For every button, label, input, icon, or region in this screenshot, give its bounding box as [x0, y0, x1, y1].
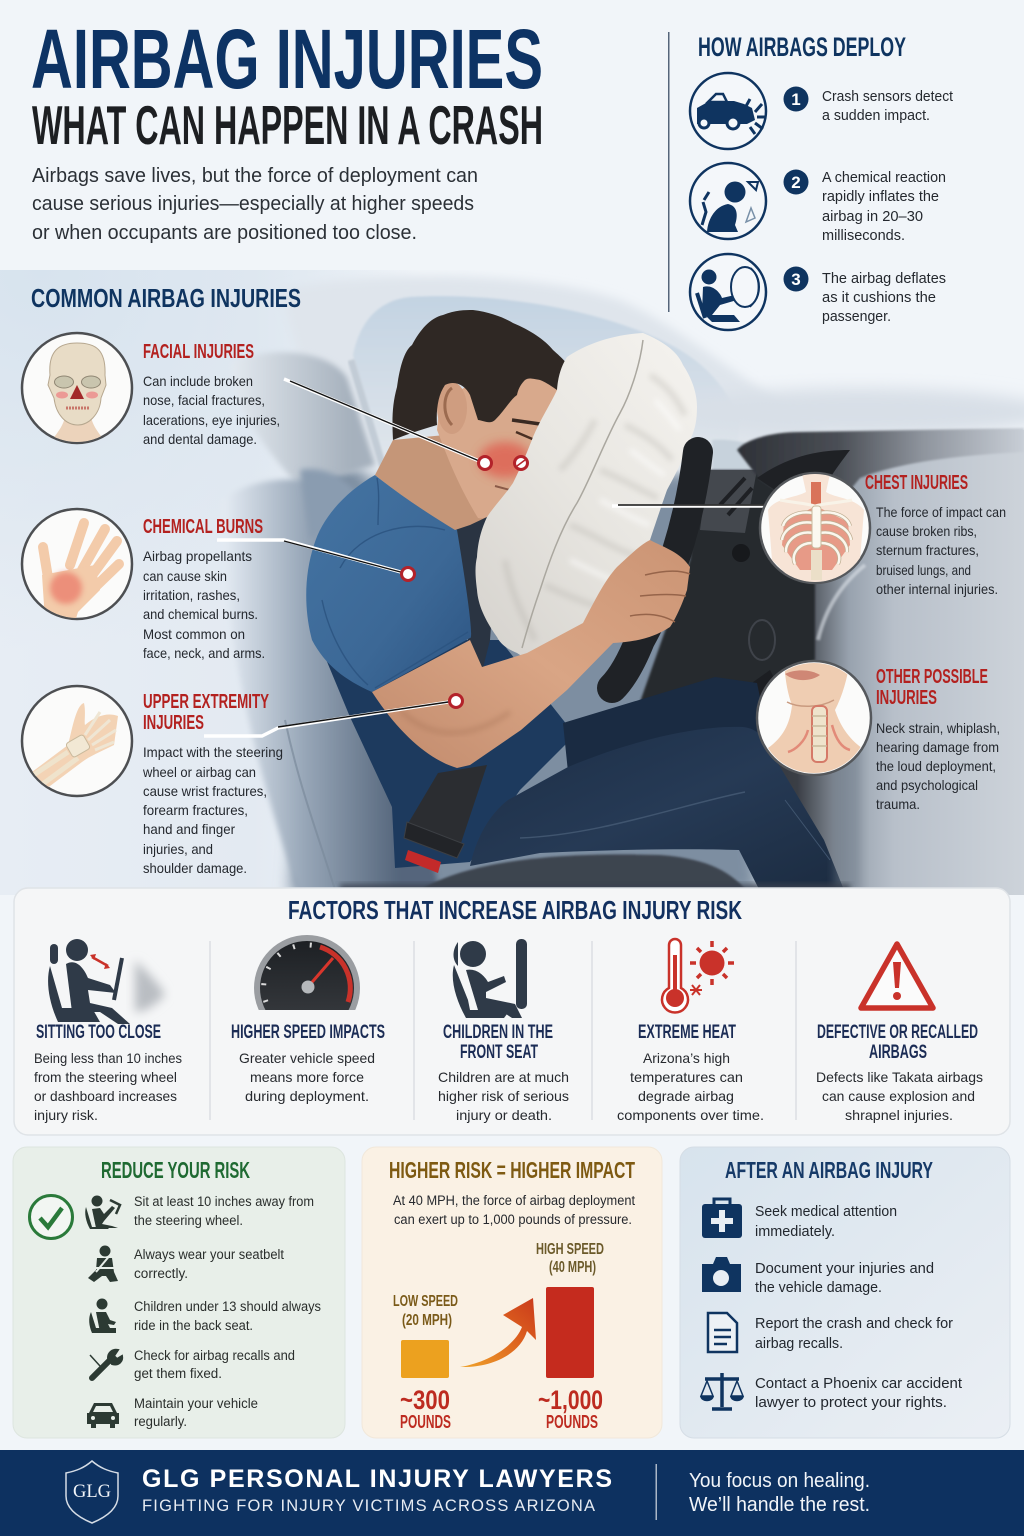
- value: about 300 pounds: ~300: [400, 1385, 450, 1415]
- text: seek medical attention: Seek medical attention: [755, 1204, 897, 1220]
- text: step 3: [822, 271, 946, 325]
- icon: skull medallion: [22, 333, 132, 445]
- text: higher speed impacts: Greater vehicle speed: [239, 1050, 375, 1066]
- text: report crash: airbag recalls.: [755, 1336, 843, 1352]
- text: step 1: [822, 89, 953, 124]
- text: report crash: [755, 1316, 953, 1352]
- heading: how airbags deploy: HOW AIRBAGS DEPLOY: [698, 32, 906, 62]
- text: chemical burns: Airbag propellants: [143, 548, 252, 564]
- heading: extreme heat: EXTREME HEAT: [638, 1022, 736, 1043]
- gap behind arm and bag: [456, 516, 491, 667]
- heading: children in the front seat: CHILDREN IN THE: [443, 1022, 553, 1043]
- lower torso: [318, 640, 575, 868]
- step number 1: 1: [791, 90, 801, 109]
- step number 1: [784, 86, 808, 112]
- callout lines and markers: [204, 379, 770, 736]
- heading: after an airbag injury: AFTER AN AIRBAG INJURY: [725, 1157, 933, 1183]
- text: sitting too close: Being less than 10 inches: [34, 1050, 182, 1066]
- factor: defective or recalled airbags: [816, 944, 983, 1123]
- text: defective or recalled airbags: shrapnel injuries.: [845, 1107, 953, 1123]
- text: step 1: Crash sensors detect: [822, 89, 953, 105]
- icon: ribcage medallion: [760, 473, 870, 583]
- text: check recalls: get them fixed.: [134, 1366, 222, 1381]
- value: about 1000 pounds: POUNDS: [546, 1412, 598, 1432]
- text: check recalls: Check for airbag recalls and: [134, 1348, 295, 1363]
- text: chemical burns: Most common on: [143, 626, 245, 642]
- icon: chemical inflation: [690, 163, 766, 239]
- label: low speed: [393, 1293, 458, 1329]
- icon: burned hand medallion: [22, 509, 132, 625]
- legs in jeans: [470, 677, 846, 895]
- intro paragraph: [32, 165, 478, 244]
- text: wear seatbelt: Always wear your seatbelt: [134, 1247, 284, 1262]
- panel: chemical burns: [22, 509, 265, 661]
- icon: document: [708, 1313, 737, 1352]
- icon: check mark: [30, 1196, 72, 1238]
- text: chest injuries: [876, 504, 1006, 597]
- heading: children in the front seat: [443, 1022, 553, 1063]
- text: step 2: airbag in 20–30: [822, 209, 923, 225]
- text: check recalls: [134, 1348, 295, 1381]
- text: upper extremity injuries: wheel or airbag can: [142, 764, 256, 780]
- icon: speedometer: [254, 935, 360, 1010]
- heading: upper extremity injuries: [143, 691, 269, 734]
- step number 2: [784, 170, 808, 194]
- man body in blue shirt: [306, 475, 471, 692]
- panel: higher risk equals higher impact: [362, 1147, 662, 1438]
- text: maintain vehicle: regularly.: [134, 1414, 187, 1429]
- text: other possible injuries: trauma.: [876, 796, 920, 812]
- footer band: [0, 1450, 1024, 1536]
- text: seek medical attention: immediately.: [755, 1224, 835, 1240]
- text: upper extremity injuries: shoulder damage.: [143, 860, 247, 876]
- text: other possible injuries: Neck strain, whiplash,: [876, 720, 1000, 736]
- icon: airbag deflates: [690, 254, 766, 330]
- interior mid tone: [280, 468, 758, 888]
- forearm and hand: [372, 540, 690, 768]
- intro paragraph: cause serious injuries—especially at higher speeds: [32, 193, 474, 215]
- text: step 3: passenger.: [822, 309, 891, 325]
- text: chemical burns: [143, 548, 265, 661]
- title: AIRBAG INJURIES: [31, 12, 543, 106]
- icon: seatbelt: [88, 1246, 118, 1282]
- text: chemical burns: can cause skin: [143, 568, 227, 584]
- text: higher speed impacts: [239, 1050, 375, 1104]
- heading: sitting too close: SITTING TOO CLOSE: [36, 1022, 161, 1043]
- text: chest injuries: other internal injuries.: [876, 581, 998, 597]
- text: maintain vehicle: Maintain your vehicle: [134, 1396, 258, 1411]
- pillar: [351, 360, 384, 470]
- arrow: rising force: [460, 1298, 536, 1367]
- text: step 1: a sudden impact.: [822, 108, 930, 124]
- text: sit away from wheel: the steering wheel.: [134, 1213, 243, 1228]
- heading: higher risk: HIGHER RISK = HIGHER IMPACT: [389, 1157, 635, 1183]
- icon: scales of justice: [700, 1373, 744, 1409]
- icon: warning triangle: [861, 944, 933, 1008]
- text: report crash: Report the crash and check for: [755, 1316, 953, 1332]
- icon: child in front seat: [453, 939, 527, 1018]
- text: defective or recalled airbags: can cause explosion and: [822, 1088, 975, 1104]
- heading: children in the front seat: FRONT SEAT: [460, 1042, 538, 1063]
- deployment divider: [668, 32, 670, 312]
- heading: facial injuries: FACIAL INJURIES: [143, 341, 254, 363]
- text: document injuries: Document your injuries and: [755, 1261, 934, 1277]
- icon: wrist bones medallion: [22, 686, 132, 796]
- icon: crash sensors: [690, 73, 766, 149]
- factor: sitting too close: [34, 939, 182, 1123]
- steering wheel: [612, 452, 698, 688]
- text: children in the front seat: higher risk of serious: [438, 1088, 569, 1104]
- heading: other possible injuries: INJURIES: [876, 687, 937, 709]
- logo: GLG shield: [66, 1461, 118, 1523]
- icon: car: [87, 1403, 119, 1428]
- text: upper extremity injuries: [142, 744, 283, 876]
- bar: high speed: [546, 1287, 594, 1378]
- heading: other possible injuries: [876, 666, 988, 709]
- text: children back seat: [134, 1299, 321, 1333]
- text: seek medical attention: [755, 1204, 897, 1240]
- panel: chest injuries: [760, 472, 1006, 597]
- logo: GLG shield: GLG: [73, 1481, 111, 1502]
- value: about 1000 pounds: ~1,000: [538, 1385, 603, 1415]
- text: contact a lawyer: [755, 1376, 962, 1411]
- text: sit away from wheel: [134, 1194, 314, 1228]
- footer firm name: GLG PERSONAL INJURY LAWYERS: [142, 1465, 612, 1493]
- step number 3: 3: [791, 270, 801, 289]
- icon: thermometer and sun: [662, 939, 734, 1013]
- factor: higher speed impacts: [231, 935, 385, 1104]
- heading: chemical burns: CHEMICAL BURNS: [143, 516, 263, 538]
- text: facial injuries: [143, 373, 280, 447]
- seat belt and buckle: [404, 765, 487, 873]
- text: force explanation: At 40 MPH, the force of airbag deployment: [393, 1193, 635, 1208]
- text: chemical burns: face, neck, and arms.: [143, 645, 265, 661]
- heading: higher speed impacts: HIGHER SPEED IMPACTS: [231, 1022, 385, 1043]
- panel: other possible injuries: [757, 660, 1000, 812]
- heading: defective or recalled airbags: [817, 1022, 978, 1063]
- text: children back seat: ride in the back seat.: [134, 1318, 253, 1333]
- label: high speed: (40 MPH): [549, 1259, 596, 1276]
- text: wear seatbelt: [134, 1247, 284, 1281]
- driver seat and headrest: [222, 352, 440, 895]
- text: extreme heat: components over time.: [617, 1107, 764, 1123]
- text: upper extremity injuries: hand and finger: [143, 821, 235, 837]
- value: about 300 pounds: [400, 1385, 451, 1432]
- text: children in the front seat: Children are at much: [438, 1069, 569, 1085]
- text: chemical burns: irritation, rashes,: [143, 587, 240, 603]
- text: chest injuries: The force of impact can: [876, 504, 1006, 520]
- text: other possible injuries: the loud deployment,: [876, 758, 996, 774]
- text: upper extremity injuries: forearm fractures,: [143, 802, 248, 818]
- text: defective or recalled airbags: Defects like Takata airbags: [816, 1069, 983, 1085]
- panel: after an airbag injury: [680, 1147, 1010, 1438]
- text: sitting too close: from the steering wheel: [34, 1069, 177, 1085]
- window: [353, 296, 740, 470]
- text: sit away from wheel: Sit at least 10 inches away from: [134, 1194, 314, 1209]
- pale haze above dash: [764, 384, 1024, 432]
- icon: first aid kit: [702, 1199, 742, 1238]
- panel: how airbags deploy: [690, 32, 953, 330]
- bar chart: force by speed: [393, 1241, 604, 1432]
- text: step 2: [822, 170, 946, 244]
- text: children in the front seat: injury or death.: [456, 1107, 552, 1123]
- step number 2: 2: [791, 173, 801, 192]
- heading: upper extremity injuries: INJURIES: [143, 712, 204, 734]
- title: [31, 12, 543, 156]
- icon: driver close to wheel: [48, 939, 165, 1024]
- text: step 3: as it cushions the: [822, 290, 936, 306]
- heading: upper extremity injuries: UPPER EXTREMITY: [143, 691, 269, 713]
- footer firm name: FIGHTING FOR INJURY VICTIMS ACROSS ARIZONA: [142, 1497, 595, 1515]
- bottom seat cushion: [426, 853, 744, 888]
- text: force explanation: can exert up to 1,000 pounds of pressure.: [394, 1212, 632, 1227]
- icon: child seat: [89, 1298, 116, 1333]
- text: upper extremity injuries: cause wrist fractures,: [143, 783, 267, 799]
- panel: facial injuries: [22, 333, 280, 447]
- text: extreme heat: temperatures can: [630, 1069, 743, 1085]
- text: extreme heat: Arizona’s high: [643, 1050, 730, 1066]
- text: defective or recalled airbags: [816, 1069, 983, 1123]
- heading: reduce your risk: REDUCE YOUR RISK: [101, 1157, 250, 1183]
- text: chest injuries: sternum fractures,: [876, 542, 979, 558]
- icon: camera: [702, 1257, 741, 1292]
- text: higher speed impacts: means more force: [250, 1069, 364, 1085]
- title: WHAT CAN HAPPEN IN A CRASH: [32, 94, 543, 156]
- fade at right of legs: [830, 750, 864, 888]
- text: step 3: The airbag deflates: [822, 271, 946, 287]
- label: high speed: HIGH SPEED: [536, 1241, 604, 1258]
- factor: extreme heat: [617, 939, 764, 1123]
- label: low speed: LOW SPEED: [393, 1293, 458, 1310]
- airbag: [476, 333, 697, 668]
- text: sitting too close: injury risk.: [34, 1107, 98, 1123]
- value: about 300 pounds: POUNDS: [400, 1412, 451, 1432]
- text: facial injuries: Can include broken: [143, 373, 253, 389]
- icon: wrench: [90, 1350, 122, 1378]
- bottom shadow: [337, 881, 853, 888]
- heading: common airbag injuries: COMMON AIRBAG INJURIES: [31, 283, 301, 313]
- text: higher speed impacts: during deployment.: [245, 1088, 369, 1104]
- text: other possible injuries: [876, 720, 1000, 812]
- footer firm name: [142, 1465, 612, 1515]
- text: chest injuries: bruised lungs, and: [876, 562, 971, 578]
- text: extreme heat: [617, 1050, 764, 1123]
- text: upper extremity injuries: Impact with the steering: [143, 744, 283, 760]
- text: chest injuries: cause broken ribs,: [876, 523, 977, 539]
- panel: factors that increase airbag injury risk: [14, 888, 1010, 1135]
- intro paragraph: Airbags save lives, but the force of deployment can: [32, 165, 478, 187]
- dashboard and dark right side: [640, 428, 1024, 895]
- roof band: [326, 276, 773, 476]
- text: step 2: rapidly inflates the: [822, 189, 939, 205]
- text: extreme heat: degrade airbag: [638, 1088, 734, 1104]
- text: other possible injuries: hearing damage from: [876, 739, 999, 755]
- neck and head: [375, 310, 570, 530]
- panel: upper extremity injuries: [22, 686, 283, 876]
- hero illustration: driver hitting airbag: [0, 270, 1024, 898]
- footer tagline: We’ll handle the rest.: [689, 1494, 870, 1516]
- value: about 1000 pounds: [538, 1385, 603, 1432]
- text: children in the front seat: [438, 1069, 569, 1123]
- text: children back seat: Children under 13 should always: [134, 1299, 321, 1314]
- text: step 2: milliseconds.: [822, 228, 905, 244]
- text: other possible injuries: and psychological: [876, 777, 978, 793]
- text: document injuries: [755, 1261, 934, 1296]
- heading: factors: FACTORS THAT INCREASE AIRBAG INJURY RISK: [288, 895, 742, 925]
- text: sitting too close: [34, 1050, 182, 1123]
- heading: defective or recalled airbags: AIRBAGS: [869, 1042, 927, 1063]
- text: upper extremity injuries: injuries, and: [143, 841, 213, 857]
- factor: children in the front seat: [438, 939, 569, 1123]
- label: high speed: [536, 1241, 604, 1276]
- text: wear seatbelt: correctly.: [134, 1266, 188, 1281]
- text: maintain vehicle: [134, 1396, 258, 1429]
- icon: neck medallion: [757, 660, 871, 775]
- text: facial injuries: and dental damage.: [143, 431, 257, 447]
- bar: low speed: [401, 1340, 449, 1378]
- icon: driver distance: [85, 1196, 120, 1229]
- intro paragraph: or when occupants are positioned too close.: [32, 222, 417, 244]
- panel: reduce your risk: [13, 1147, 345, 1438]
- text: step 2: A chemical reaction: [822, 170, 946, 186]
- footer tagline: [689, 1470, 870, 1516]
- text: force explanation: [393, 1193, 635, 1227]
- text: contact a lawyer: lawyer to protect your rights.: [755, 1395, 947, 1411]
- text: chemical burns: and chemical burns.: [143, 606, 258, 622]
- text: contact a lawyer: Contact a Phoenix car accident: [755, 1376, 962, 1392]
- text: document injuries: the vehicle damage.: [755, 1280, 882, 1296]
- text: facial injuries: lacerations, eye injuries,: [143, 412, 280, 428]
- footer tagline: You focus on healing.: [689, 1470, 870, 1492]
- step number 3: [784, 266, 808, 292]
- label: low speed: (20 MPH): [402, 1312, 452, 1329]
- text: sitting too close: or dashboard increases: [34, 1088, 177, 1104]
- text: facial injuries: nose, facial fractures,: [143, 392, 265, 408]
